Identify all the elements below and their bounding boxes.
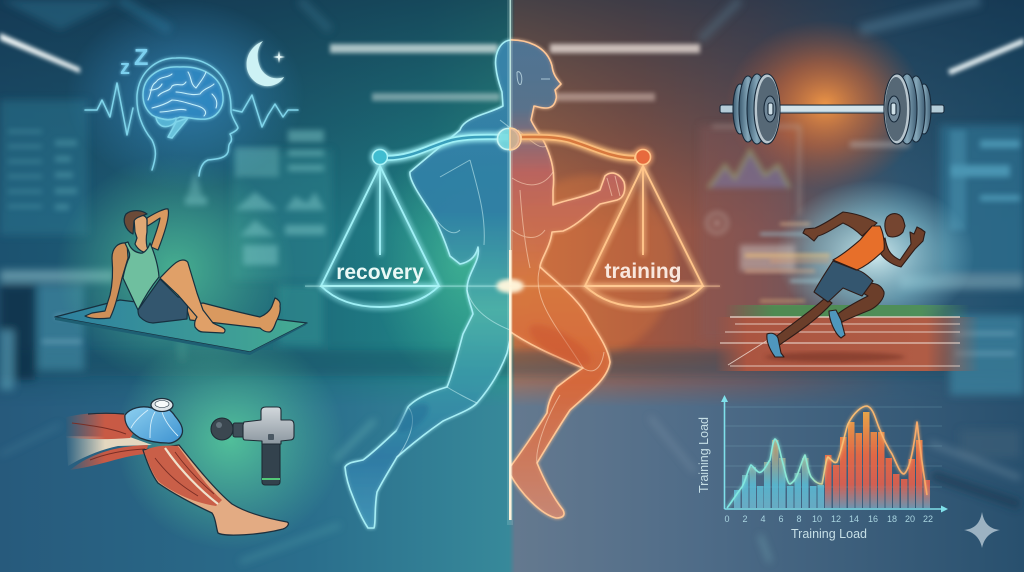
rear leg [773, 298, 832, 346]
heart wave right [233, 95, 298, 127]
background dashboard panels [8, 125, 1020, 355]
sleep letters: z [120, 57, 130, 79]
x tick numbers [724, 514, 933, 524]
icon: sparkle watermark [964, 512, 1000, 548]
front shoe [829, 310, 845, 338]
x axis title: Training Load [791, 527, 867, 541]
x tick numbers: 2 [742, 514, 748, 524]
raised arm behind head [147, 209, 168, 250]
x tick numbers: 22 [923, 514, 933, 524]
axes [721, 395, 948, 512]
yoga mat [55, 300, 307, 352]
head outline [137, 58, 238, 176]
label: training: training [604, 260, 682, 283]
ceiling lights [0, 33, 1024, 101]
x tick numbers: 0 [724, 514, 730, 524]
y axis title: Training Load [697, 417, 711, 493]
motion streaks [745, 223, 830, 302]
bars rising [734, 440, 824, 508]
left pan bowl [321, 286, 439, 307]
x tick numbers: 16 [868, 514, 878, 524]
scale beam right [512, 137, 636, 158]
front leg [835, 283, 884, 322]
balance scale: training side [512, 137, 703, 307]
scale beam left [386, 137, 508, 158]
grid lines [725, 407, 942, 487]
calf muscle [144, 446, 222, 506]
sleep letters: Z [134, 44, 148, 70]
front arm and hand [878, 227, 925, 267]
beam inner tube right [522, 137, 634, 158]
label: recovery: recovery [336, 261, 424, 284]
right pivot [636, 150, 650, 164]
trend curve [727, 406, 927, 508]
thigh muscle [66, 413, 133, 439]
x tick numbers: 18 [887, 514, 897, 524]
x tick numbers: 20 [905, 514, 915, 524]
neck and face [134, 215, 150, 253]
x tick numbers: 4 [760, 514, 766, 524]
x tick numbers: 8 [796, 514, 802, 524]
knee band [66, 436, 152, 466]
icon: sleeping brain with heart wave [85, 58, 298, 176]
training half of body [508, 40, 625, 518]
illustration: glowing split runner [345, 40, 625, 528]
beam inner tube left [388, 137, 500, 158]
horizontal balance flare [305, 280, 720, 292]
illustration: leg with ice pack [66, 398, 288, 535]
rear shoe [767, 333, 784, 357]
ear and face details [517, 72, 550, 84]
balance scale: recovery side [321, 137, 508, 307]
shorts [138, 279, 188, 323]
tendon highlight [165, 448, 218, 504]
sleep letters [120, 44, 148, 79]
support arm [85, 243, 128, 319]
ice pack [125, 398, 183, 443]
icon: barbell [720, 74, 944, 144]
sprint track [715, 305, 980, 371]
x tick numbers: 10 [812, 514, 822, 524]
illustration: athlete resting on mat [55, 209, 307, 355]
heart wave left [85, 83, 133, 135]
x tick numbers: 14 [849, 514, 859, 524]
back arm [803, 212, 877, 241]
rear leg [186, 298, 280, 332]
hair [124, 211, 147, 234]
left plates [733, 74, 780, 144]
brain [143, 67, 223, 138]
shorts [814, 261, 873, 302]
chart: training load [697, 395, 948, 541]
head [885, 214, 905, 237]
x tick numbers: 6 [778, 514, 784, 524]
illustration: sprinter [767, 212, 925, 357]
right plates [884, 74, 931, 144]
orange tank [833, 226, 884, 270]
bars peaking [825, 412, 930, 508]
x tick numbers: 12 [831, 514, 841, 524]
lower leg and foot [143, 445, 288, 535]
hamstring [70, 445, 148, 470]
icon: massage gun [211, 407, 294, 485]
left pivot [372, 150, 388, 164]
recovery half of body [345, 40, 512, 528]
right pan strings [585, 166, 703, 286]
scale centre hinge [498, 128, 521, 150]
icon: crescent moon and star [247, 41, 285, 86]
right pan bowl [585, 286, 703, 307]
central divider line [507, 0, 513, 525]
bent leg [160, 260, 225, 333]
tank top [123, 242, 159, 310]
left pan strings [321, 166, 439, 286]
